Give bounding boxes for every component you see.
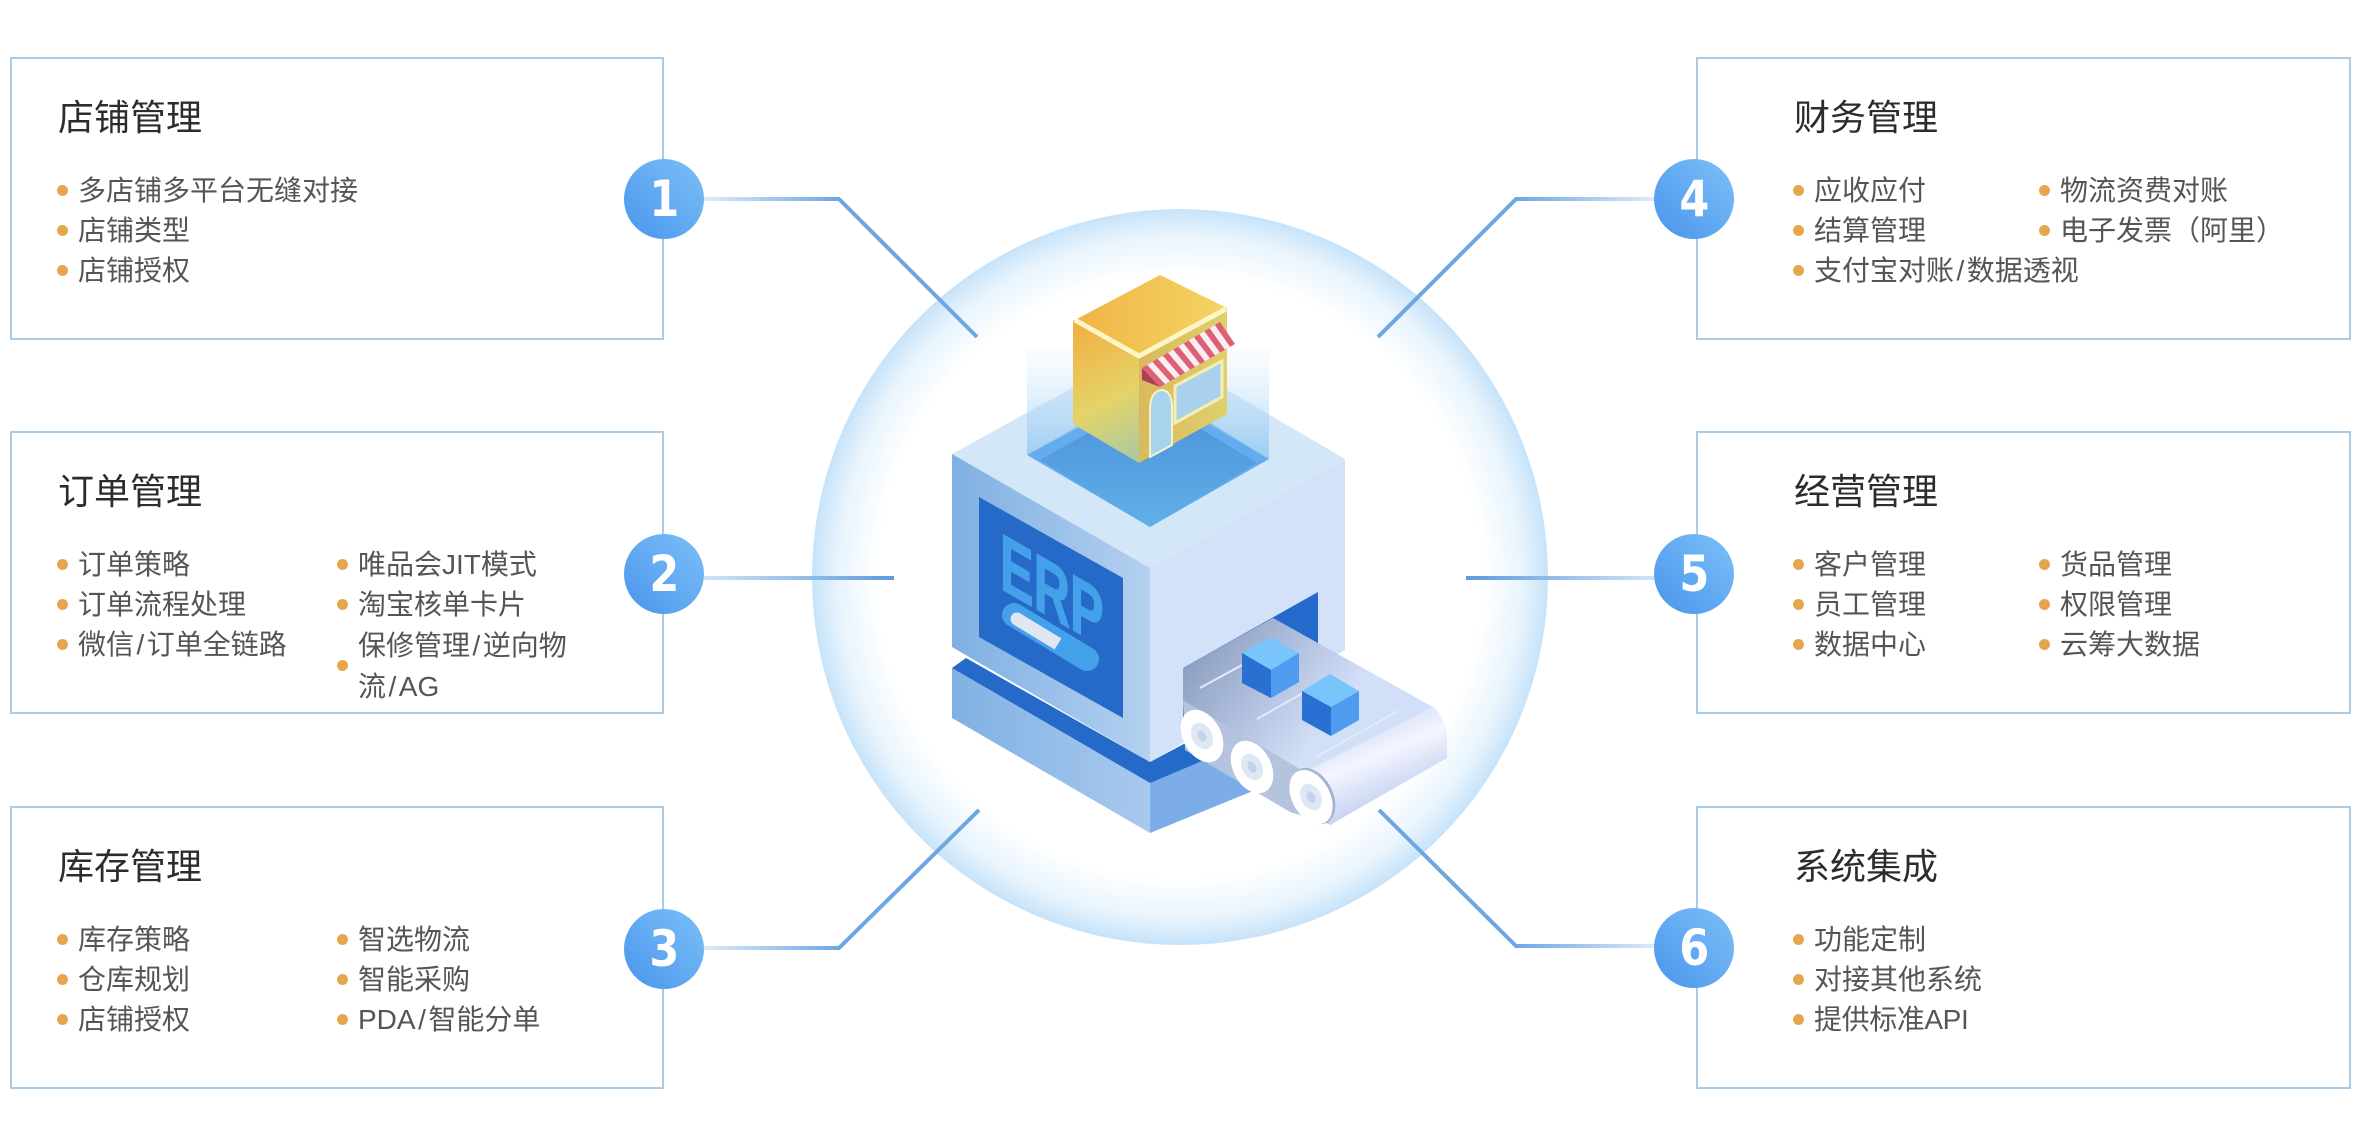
conveyor belt xyxy=(1172,618,1447,832)
list: order management column two xyxy=(337,549,567,702)
halo circle xyxy=(812,209,1548,945)
list: finance management column one: 支付宝对账/数据透视 xyxy=(1814,255,2079,286)
list: inventory management column one xyxy=(57,924,190,1035)
badge 6: 6 xyxy=(1679,919,1709,977)
badge 3: 3 xyxy=(649,920,679,978)
badge 6 xyxy=(1654,908,1734,988)
list: inventory management column two: 智选物流 xyxy=(358,924,470,955)
door xyxy=(1150,390,1172,457)
heading: store management: 店铺管理 xyxy=(58,97,202,138)
panel: inventory management xyxy=(10,806,664,1089)
heading: operations management: 经营管理 xyxy=(1794,471,1938,512)
panel: operations management xyxy=(1696,431,2351,714)
list: store management items xyxy=(57,175,358,286)
badge 3 xyxy=(624,909,704,989)
belt surface xyxy=(1183,618,1433,772)
list: operations management column one xyxy=(1793,549,1926,660)
list: operations management column one: 员工管理 xyxy=(1814,589,1926,620)
list: finance management column two: 电子发票（阿里） xyxy=(2060,215,2284,246)
connector 3 xyxy=(704,810,979,948)
badge 1 xyxy=(624,159,704,239)
list: operations management column one: 客户管理 xyxy=(1814,549,1926,580)
panel: system integration xyxy=(1696,806,2351,1089)
panel: store management xyxy=(10,57,664,340)
list: store management items: 店铺类型 xyxy=(78,215,190,246)
list: order management column one: 微信/订单全链路 xyxy=(78,629,287,660)
heading: system integration: 系统集成 xyxy=(1794,846,1938,887)
drum xyxy=(1305,707,1447,825)
box 2 xyxy=(1302,674,1359,736)
badge 5: 5 xyxy=(1679,545,1709,603)
list: order management column one: 订单流程处理 xyxy=(78,589,246,620)
badge 4: 4 xyxy=(1679,170,1709,228)
badge 2 xyxy=(624,534,704,614)
list: order management column one: 订单策略 xyxy=(78,549,190,580)
list: finance management column two xyxy=(2039,175,2284,246)
list: finance management column one xyxy=(1793,175,2079,286)
recessed floor with glass xyxy=(1027,348,1269,527)
box 1 xyxy=(1242,637,1299,698)
badge 4 xyxy=(1654,159,1734,239)
list: system integration items: 对接其他系统 xyxy=(1814,964,1982,995)
machine base xyxy=(952,658,1280,833)
belt stitching xyxy=(1200,665,1398,757)
list: inventory management column one: 仓库规划 xyxy=(78,964,190,995)
list: operations management column two: 货品管理 xyxy=(2060,549,2172,580)
heading: order management: 订单管理 xyxy=(58,471,202,512)
roller 2 xyxy=(1222,733,1282,801)
connector 4 xyxy=(1378,199,1654,337)
list: order management column one xyxy=(57,549,287,660)
panel: order management xyxy=(10,431,664,714)
list: store management items: 店铺授权 xyxy=(78,255,190,286)
list: store management items: 多店铺多平台无缝对接 xyxy=(78,175,358,206)
list: operations management column two: 云筹大数据 xyxy=(2060,629,2200,660)
badge 2: 2 xyxy=(649,545,679,603)
connector 5 xyxy=(1466,576,1654,580)
list: operations management column one: 数据中心 xyxy=(1814,629,1926,660)
awning xyxy=(1142,322,1235,387)
connector 6 xyxy=(1379,810,1654,946)
ERP label: ERP xyxy=(1000,516,1104,665)
icon: shop xyxy=(1073,275,1235,463)
list: order management column two: 淘宝核单卡片 xyxy=(358,589,526,620)
connector 2 xyxy=(704,576,894,580)
panel: order management: 流/AG xyxy=(358,671,439,702)
panel: finance management xyxy=(1696,57,2351,340)
machine body xyxy=(952,345,1345,762)
list: inventory management column one: 店铺授权 xyxy=(78,1004,190,1035)
belt side xyxy=(1183,700,1332,825)
connector 1 xyxy=(704,199,977,337)
heading: inventory management: 库存管理 xyxy=(58,846,202,887)
badge 5 xyxy=(1654,534,1734,614)
list: operations management column two: 权限管理 xyxy=(2060,589,2172,620)
list: system integration items: 提供标准API xyxy=(1814,1004,1968,1035)
list: inventory management column two: 智能采购 xyxy=(358,964,470,995)
opening in the machine xyxy=(1183,592,1318,722)
list: system integration items: 功能定制 xyxy=(1814,924,1926,955)
list: inventory management column two xyxy=(337,924,540,1035)
progress bar xyxy=(1010,612,1087,659)
heading: finance management: 财务管理 xyxy=(1794,97,1938,138)
roller 1 xyxy=(1172,702,1232,770)
list: finance management column one: 结算管理 xyxy=(1814,215,1926,246)
list: system integration items xyxy=(1793,924,1982,1035)
badge 1: 1 xyxy=(649,170,679,228)
list: finance management column one: 应收应付 xyxy=(1814,175,1926,206)
roller 3 xyxy=(1280,760,1345,832)
list: finance management column two: 物流资费对账 xyxy=(2060,175,2228,206)
list: inventory management column two: PDA/智能分单 xyxy=(358,1004,540,1035)
list: inventory management column one: 库存策略 xyxy=(78,924,190,955)
screen panel xyxy=(979,497,1123,718)
list: order management column two: 保修管理/逆向物 xyxy=(358,630,567,661)
list: operations management column two xyxy=(2039,549,2200,660)
window xyxy=(1175,361,1222,423)
list: order management column two: 唯品会JIT模式 xyxy=(358,549,537,580)
